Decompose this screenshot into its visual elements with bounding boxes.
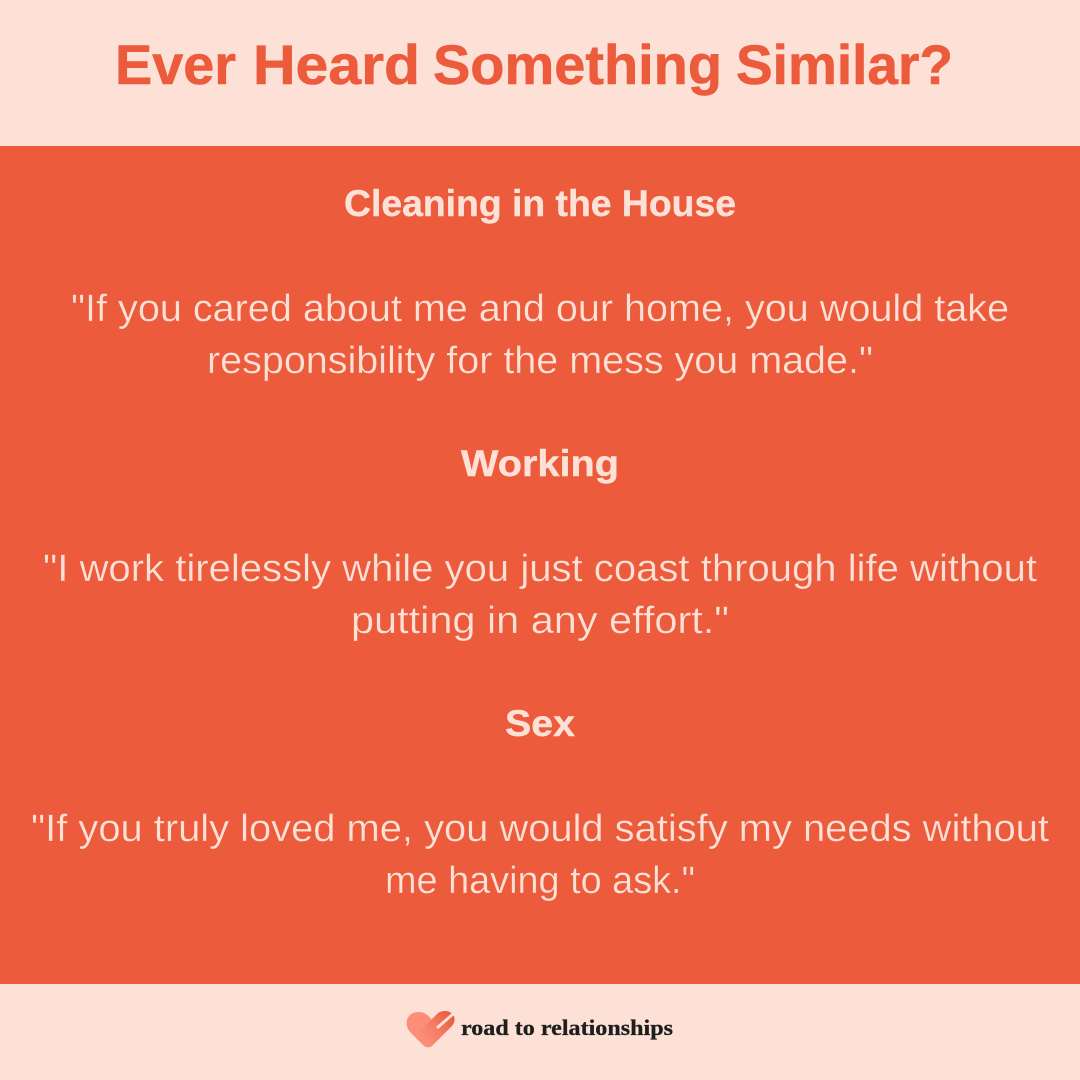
title: Ever — [115, 33, 236, 96]
quote: sex — [31, 808, 1049, 902]
quote: cleaning — [71, 288, 1009, 382]
section: cleaning in the house — [71, 183, 1009, 382]
section: working — [43, 443, 1037, 642]
quote: sex: "If you truly loved me, you would satisfy my needs without — [31, 808, 1049, 850]
panel: main orange panel — [0, 146, 1080, 984]
title: Something — [433, 33, 722, 96]
quote: cleaning: "If you cared about me and our home, you would take — [71, 288, 1009, 330]
quote: working: "I work tirelessly while you just coast through life without — [43, 548, 1037, 590]
section: sex — [31, 703, 1049, 902]
quote: cleaning: responsibility for the mess you made." — [207, 340, 873, 382]
brand name: road to relationships — [461, 1015, 673, 1040]
heading: sex: Sex — [505, 703, 575, 744]
heading: working: Working — [461, 443, 619, 484]
icon: heart with check — [407, 1011, 455, 1047]
quote: working — [43, 548, 1037, 642]
title — [115, 33, 953, 96]
title: Similar? — [736, 33, 953, 96]
title: Heard — [253, 33, 420, 96]
quote: working: putting in any effort." — [351, 600, 729, 642]
heading: cleaning: Cleaning in the House — [344, 183, 736, 224]
footer logo — [407, 1011, 673, 1047]
quote: sex: me having to ask." — [385, 860, 695, 902]
